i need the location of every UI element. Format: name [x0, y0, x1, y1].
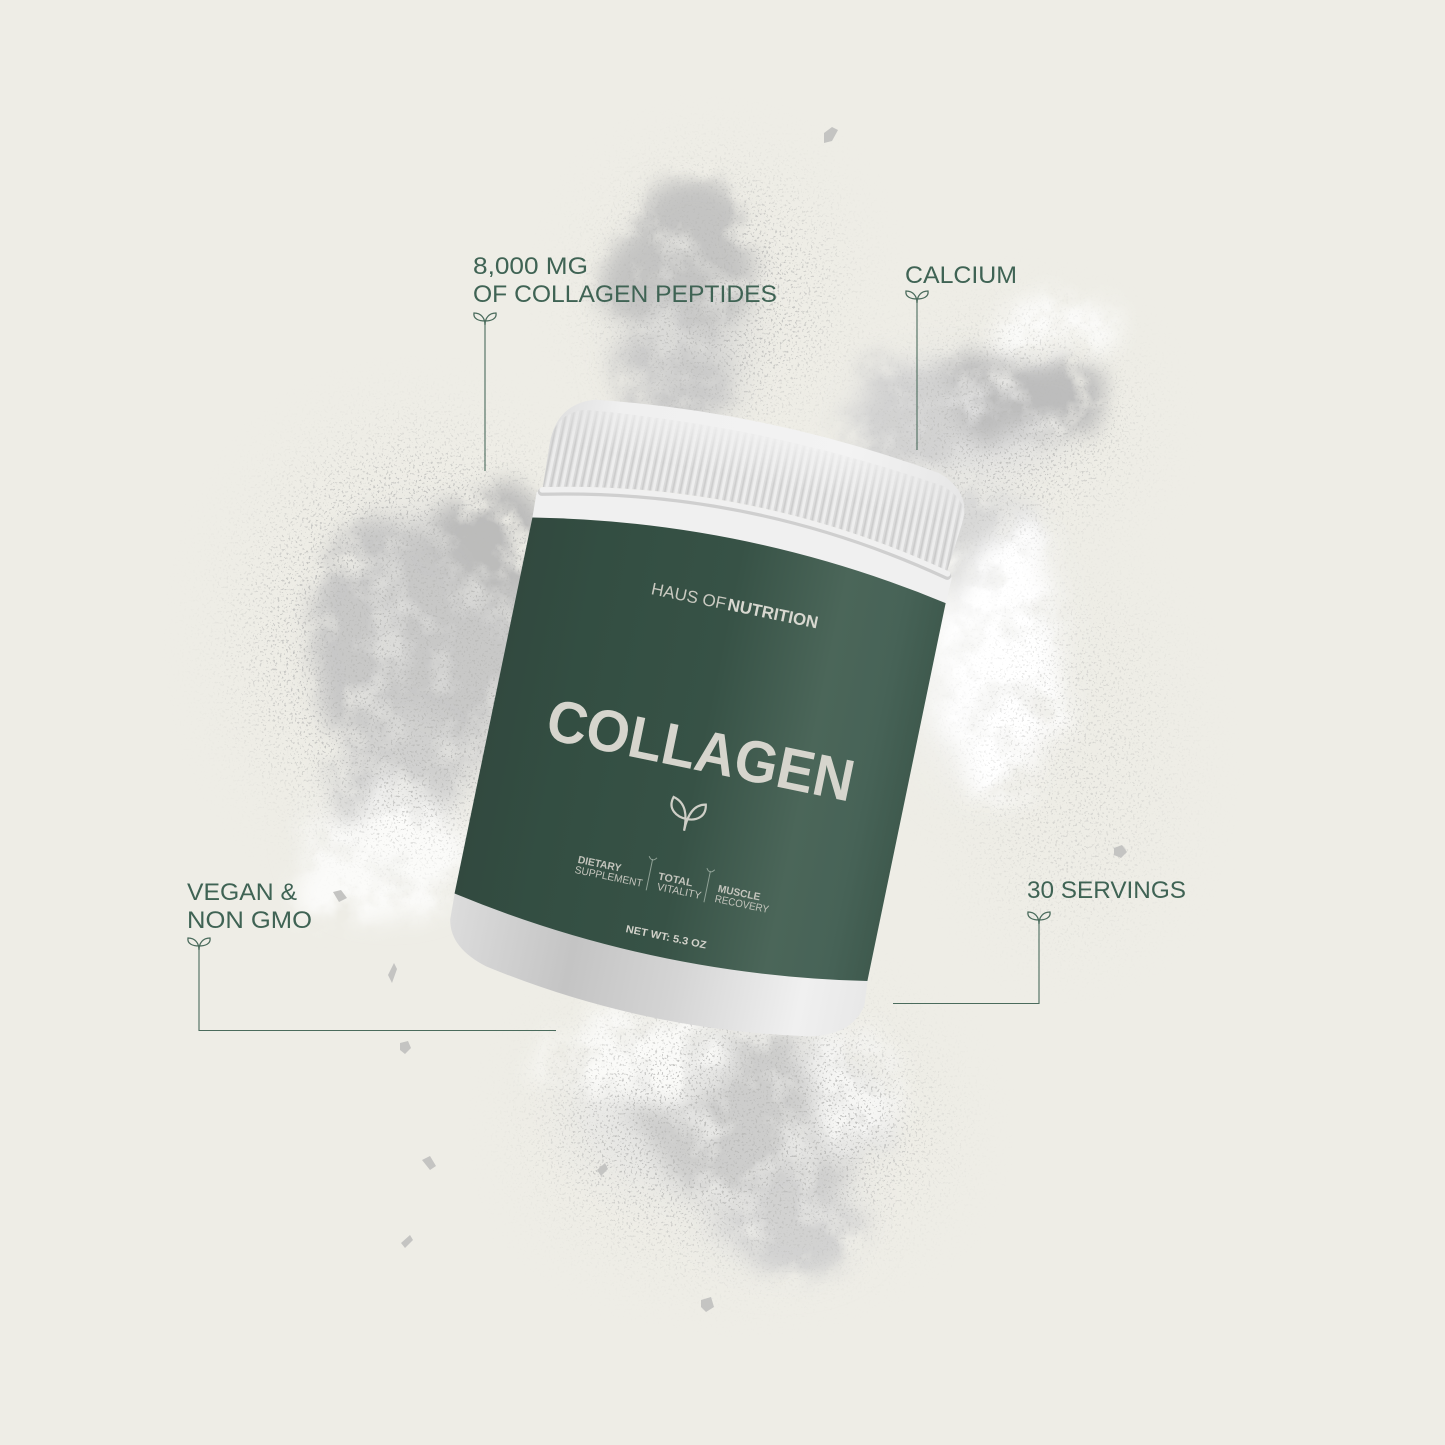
benefit: total vitality: [655, 871, 705, 902]
callout: vegan and non gmo: [187, 879, 556, 1030]
jar base: [438, 890, 871, 1059]
callout: vegan and non gmo: NON GMO: [187, 907, 312, 934]
jar cap: [542, 400, 964, 570]
benefit: total vitality: VITALITY: [656, 881, 702, 902]
powder: grey cloud: [310, 180, 1105, 1265]
powder explosion: [214, 127, 1178, 1312]
powder: soft haze: [320, 210, 1065, 1260]
benefit: total vitality: TOTAL: [657, 871, 694, 890]
benefit: muscle recovery: [714, 883, 772, 916]
powder: speckles: [214, 147, 1178, 1287]
powder: chunks: [333, 127, 1127, 1312]
callout: 30 servings: [893, 877, 1186, 1004]
callout: calcium: CALCIUM: [905, 262, 1017, 289]
benefit: dietary supplement: SUPPLEMENT: [574, 864, 644, 890]
brand name: NUTRITION: [726, 595, 820, 632]
callout: 30 servings: 30 SERVINGS: [1027, 877, 1186, 904]
jar label: [450, 498, 950, 999]
benefit: muscle recovery: MUSCLE: [717, 883, 761, 903]
benefit: muscle recovery: RECOVERY: [714, 893, 770, 916]
net weight: NET WT: 5.3 OZ: [625, 923, 708, 952]
callout: 8,000 mg of collagen peptides: [473, 253, 777, 471]
jar ring: [542, 466, 952, 576]
callout: calcium: [905, 262, 1017, 450]
callout: 8,000 mg of collagen peptides: 8,000 MG: [473, 253, 588, 280]
label dividers: [642, 856, 715, 903]
callout: 8,000 mg of collagen peptides: OF COLLAGEN PEPTIDES: [473, 281, 777, 308]
product title: COLLAGEN: [541, 687, 860, 814]
benefit: dietary supplement: DIETARY: [577, 854, 622, 875]
callout: vegan and non gmo: VEGAN &: [187, 879, 297, 906]
infographic canvas: [187, 127, 1185, 1312]
icon: label sprout: [667, 797, 707, 834]
powder: white cloud: [300, 285, 1115, 1160]
collagen jar: [450, 400, 964, 1036]
brand name: HAUS OF: [650, 579, 728, 613]
jar neck: [531, 468, 957, 606]
